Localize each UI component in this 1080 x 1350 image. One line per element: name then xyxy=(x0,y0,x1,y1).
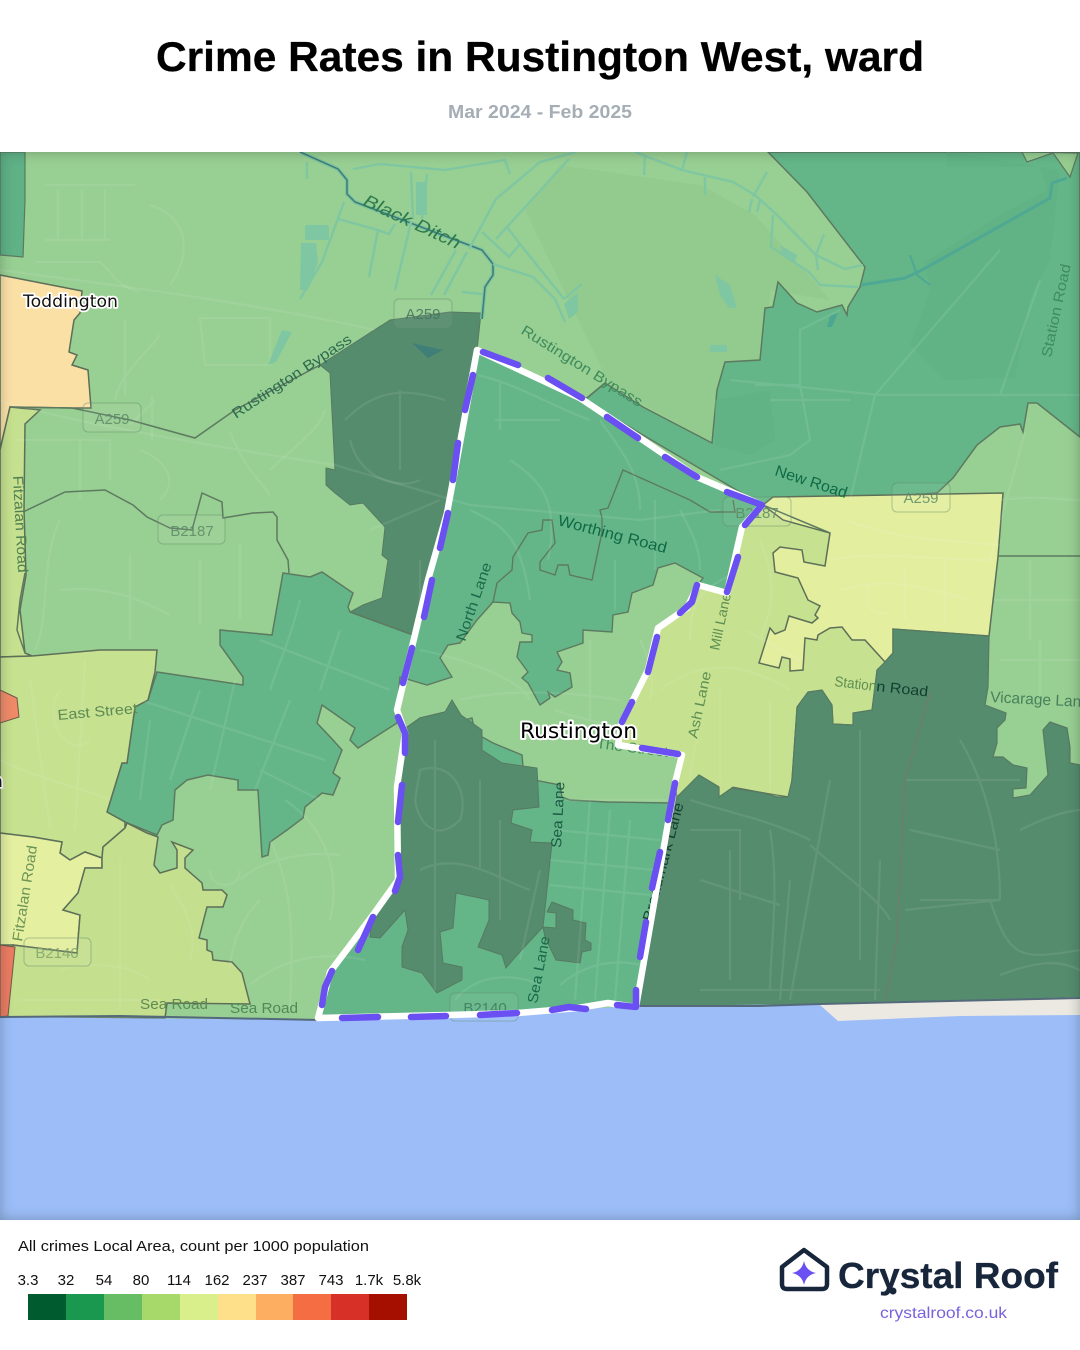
road shield labels: B2187 xyxy=(170,523,214,540)
road labels: Fitzalan Road xyxy=(10,844,41,943)
area: red patch upper xyxy=(0,690,19,723)
road shield labels: B2140 xyxy=(463,1000,507,1017)
choropleth map xyxy=(0,152,1080,1220)
road labels: East Street xyxy=(57,701,138,724)
legend scale labels xyxy=(18,1272,422,1289)
road labels: Rustington Bypass xyxy=(518,323,645,411)
legend scale labels: 1.7k xyxy=(355,1272,384,1289)
sea xyxy=(0,998,1080,1220)
area: north dark xyxy=(320,312,481,635)
road shield labels: A259 xyxy=(94,411,130,428)
road labels xyxy=(9,190,1080,1017)
area: south-east dark xyxy=(636,629,1080,1007)
area: north-east mid green xyxy=(580,152,1080,505)
road labels: Station Road xyxy=(1039,263,1075,359)
beach xyxy=(820,997,1080,1021)
road labels: Fitzalan Road xyxy=(9,475,30,573)
pond in dark area xyxy=(412,343,443,358)
legend scale labels: 80 xyxy=(133,1272,149,1289)
ward boundary: purple dashes xyxy=(322,352,762,1018)
area: east street yellow-green xyxy=(0,650,157,860)
coastline xyxy=(0,998,1080,1020)
map edge vignette xyxy=(0,152,1080,1220)
road labels: Station xyxy=(834,674,877,695)
road shields xyxy=(24,299,950,1021)
wordmark tail dot xyxy=(890,1288,896,1294)
legend colour swatches xyxy=(28,1294,407,1320)
road labels: Broadmark Lane xyxy=(640,801,687,923)
road labels: North Lane xyxy=(454,561,495,643)
area: west mid green xyxy=(107,572,413,857)
place label: Toddington: Toddington xyxy=(22,292,118,311)
road labels: Rustington Bypass xyxy=(229,332,355,422)
legend scale labels: 54 xyxy=(96,1272,112,1289)
legend scale labels: 3.3 xyxy=(18,1272,38,1289)
website url: crystalroof.co.uk xyxy=(880,1305,1008,1322)
road labels: n Road xyxy=(876,679,929,700)
boundary lines xyxy=(10,365,1080,1000)
legend scale labels: 32 xyxy=(58,1272,74,1289)
road labels: Ash Lane xyxy=(684,670,714,740)
ward boundary: white casing xyxy=(318,350,762,1018)
area: red patch lower xyxy=(0,945,15,1017)
area: south central dark xyxy=(370,700,552,993)
ponds xyxy=(268,182,797,365)
legend scale labels: 114 xyxy=(167,1272,191,1289)
road labels: Sea Road xyxy=(140,997,208,1013)
legend scale labels: 5.8k xyxy=(393,1272,422,1289)
area: subtle darker fields xyxy=(715,152,951,418)
area: south dark island xyxy=(543,902,591,963)
legend scale labels: 387 xyxy=(280,1272,306,1289)
base land area xyxy=(0,152,1080,1032)
area: pale south-west xyxy=(0,833,102,953)
wordmark: Crystal Roof xyxy=(838,1255,1059,1296)
road shield labels: B2187 xyxy=(735,505,779,522)
area: east yellow-green xyxy=(618,505,895,797)
legend scale labels: 162 xyxy=(204,1272,230,1289)
road shield labels: B2140 xyxy=(35,945,79,962)
legend scale labels: 237 xyxy=(242,1272,268,1289)
road labels: The Street xyxy=(596,735,669,760)
area: ward inner boundary xyxy=(493,470,735,602)
area: toddington cream xyxy=(0,275,91,450)
area: top-left corner xyxy=(0,152,25,257)
legend heading: All crimes Local Area, count per 1000 population xyxy=(18,1238,369,1255)
area: pale north-east xyxy=(759,493,1003,671)
area: ward mid green xyxy=(318,350,762,1018)
drainage channels xyxy=(300,152,1067,322)
road shield labels: A259 xyxy=(405,306,441,323)
area: south-west yellow-green xyxy=(6,823,250,1018)
subtitle: date range: Mar 2024 - Feb 2025 xyxy=(448,102,632,122)
stream: Black Ditch core xyxy=(300,152,493,319)
pond in mid green area xyxy=(827,313,838,327)
road labels: New Road xyxy=(773,463,849,502)
road labels: Worthing Road xyxy=(556,512,669,557)
stream: Black Ditch casing xyxy=(300,152,493,319)
road labels: Sea Road xyxy=(230,1001,298,1017)
road network xyxy=(0,185,1080,1010)
area: ward central light xyxy=(397,563,703,803)
road shield labels xyxy=(35,306,939,1017)
area: subtle field north of ward xyxy=(525,165,830,443)
road labels: Sea Lane xyxy=(549,781,568,848)
area: fitzalan strip xyxy=(0,407,40,657)
legend xyxy=(18,1238,422,1320)
road labels: Black Ditch xyxy=(360,190,464,253)
logo: Crystal Roof xyxy=(782,1250,1059,1322)
legend scale labels: 743 xyxy=(318,1272,344,1289)
area: north-east tip xyxy=(1022,152,1078,177)
road labels: Sea Lane xyxy=(525,935,554,1005)
road labels: Mill Lane xyxy=(706,591,734,652)
road shield labels: A259 xyxy=(903,490,939,507)
place label: Rustington: Rustington xyxy=(520,719,637,743)
icon: house with star xyxy=(782,1250,827,1289)
title: Crime Rates in Rustington West, ward xyxy=(156,33,924,80)
